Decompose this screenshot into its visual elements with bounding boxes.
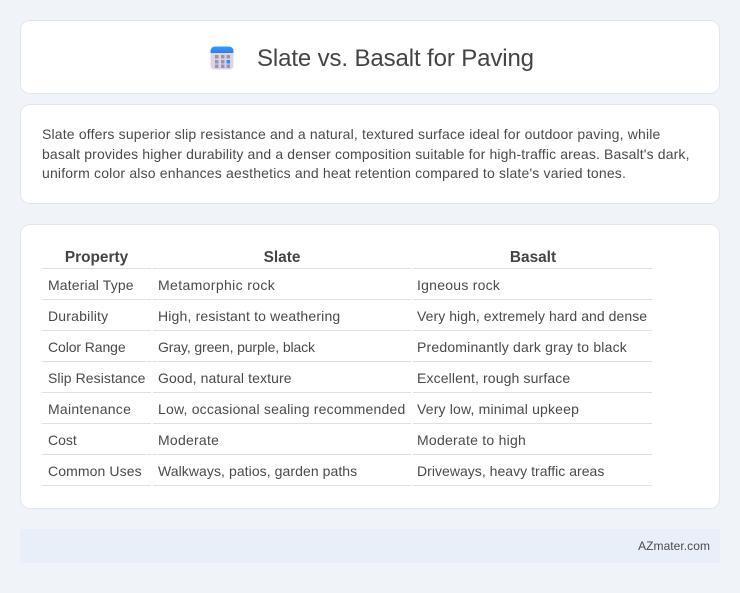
comparison table: Color Range — [48, 339, 126, 355]
comparison table: Igneous rock — [417, 277, 500, 293]
table header: Property — [65, 249, 128, 266]
comparison table: Very high, extremely hard and dense — [417, 308, 647, 324]
comparison table: Moderate to high — [417, 432, 526, 448]
footer bar — [20, 529, 720, 563]
summary text: uniform color also enhances aesthetics and heat retention compared to slate's varied tones. — [42, 165, 626, 181]
table header: Slate — [264, 249, 300, 266]
comparison table: Driveways, heavy traffic areas — [417, 463, 604, 479]
comparison table: High, resistant to weathering — [158, 308, 340, 324]
comparison table: Metamorphic rock — [158, 277, 275, 293]
panel: title card — [20, 20, 720, 94]
comparison table: Maintenance — [48, 401, 131, 417]
panel: summary card — [20, 104, 720, 204]
comparison table: Cost — [48, 432, 77, 448]
summary text: basalt provides higher durability and a denser composition suitable for high-traffic areas. Basalt's dark, — [42, 146, 690, 162]
comparison table: Low, occasional sealing recommended — [158, 401, 405, 417]
summary text — [42, 126, 690, 181]
comparison table — [42, 249, 652, 486]
comparison table: Very low, minimal upkeep — [417, 401, 579, 417]
comparison table: Good, natural texture — [158, 370, 292, 386]
summary text: Slate offers superior slip resistance and a natural, textured surface ideal for outdoor paving, while — [42, 126, 660, 142]
title: Slate vs. Basalt for Paving — [257, 45, 534, 72]
comparison table: Predominantly dark gray to black — [417, 339, 627, 355]
comparison table: Material Type — [48, 277, 134, 293]
comparison table: Excellent, rough surface — [417, 370, 570, 386]
panel: comparison table card — [20, 224, 720, 509]
comparison table: Common Uses — [48, 463, 142, 479]
icon: calendar — [210, 46, 234, 70]
table header: Basalt — [510, 249, 556, 266]
footer brand: AZmater.com — [638, 539, 710, 553]
comparison table: Gray, green, purple, black — [158, 339, 315, 355]
comparison table: Slip Resistance — [48, 370, 146, 386]
comparison table: Durability — [48, 308, 108, 324]
table header — [65, 249, 556, 266]
comparison table: Walkways, patios, garden paths — [158, 463, 357, 479]
comparison table: Moderate — [158, 432, 219, 448]
